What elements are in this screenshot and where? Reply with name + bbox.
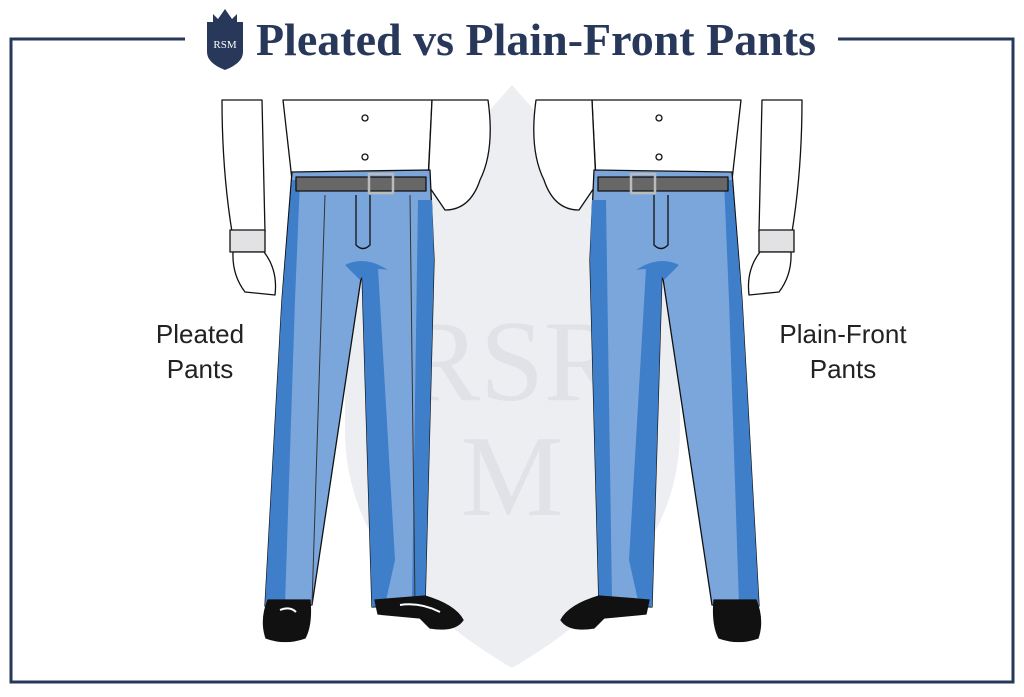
label: pleated pants: Pants (167, 354, 233, 384)
watermark shield (345, 85, 680, 668)
shoes (263, 600, 310, 642)
label: plain-front pants: Pants (810, 354, 876, 384)
watermark shield: M (461, 413, 563, 540)
icon: shield logo: RSM (213, 39, 237, 51)
label: pleated pants: Pleated (156, 319, 244, 349)
belt (296, 177, 426, 191)
title: Pleated vs Plain-Front Pants (256, 14, 816, 65)
figure: plain-front pants (mirrored) (534, 100, 802, 642)
figure: pleated pants (222, 100, 490, 642)
pants (265, 170, 434, 607)
icon: shield logo (207, 9, 243, 70)
watermark shield: RSR (403, 298, 621, 425)
label: plain-front pants: Plain-Front (779, 319, 907, 349)
shirt (283, 100, 432, 180)
